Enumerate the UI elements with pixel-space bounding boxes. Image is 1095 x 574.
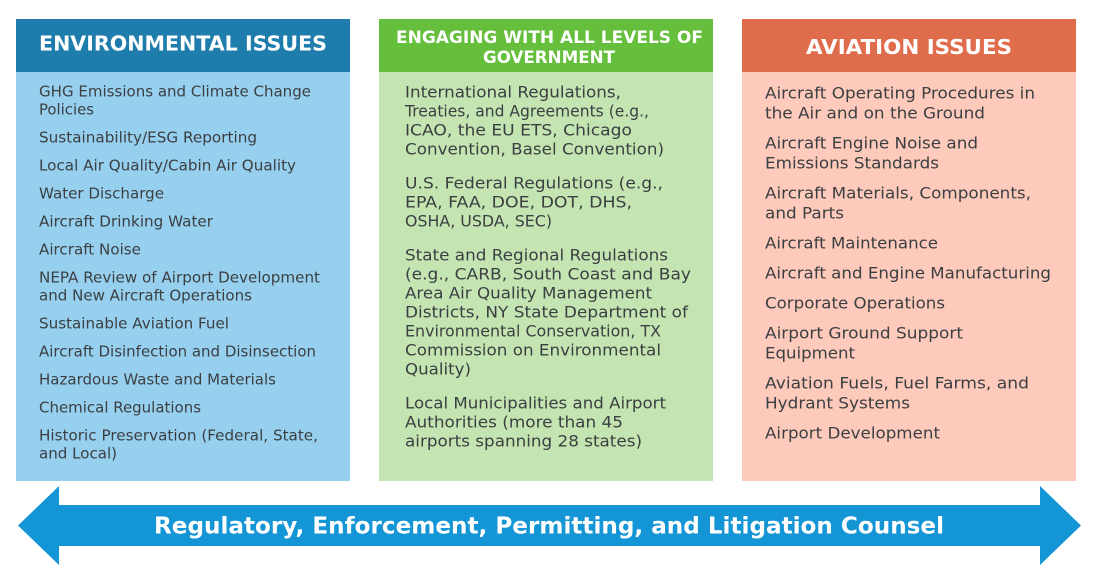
list: government levels: Commission on Environmental: [405, 340, 661, 360]
list: government levels: Area Air Quality Management: [405, 284, 652, 302]
panel: aviation issues: [742, 19, 1076, 481]
list: aviation topics: Aircraft and Engine Manufacturing: [765, 264, 1051, 282]
list: environmental topics: and Local): [39, 444, 117, 462]
list: environmental topics: Policies: [39, 100, 94, 118]
list: environmental topics: Hazardous Waste and Materials: [39, 370, 276, 388]
list: environmental topics: Sustainable Aviation Fuel: [39, 314, 229, 332]
list: environmental topics: Aircraft Disinfection and Disinsection: [39, 342, 316, 360]
arrow: regulatory, enforcement, permitting, and litigation counsel: [18, 486, 1081, 565]
list: aviation topics: and Parts: [765, 204, 844, 222]
heading: engaging with all levels of government: ENGAGING WITH ALL LEVELS OF: [396, 28, 703, 47]
list: government levels: (e.g., CARB, South Coast and Bay: [405, 264, 691, 284]
list: aviation topics: Aircraft Operating Procedures in: [765, 84, 1035, 102]
list: environmental topics: Chemical Regulations: [39, 398, 201, 416]
list: aviation topics: Aviation Fuels, Fuel Farms, and: [765, 374, 1029, 392]
list: environmental topics: GHG Emissions and Climate Change: [39, 82, 311, 100]
list: aviation topics: Corporate Operations: [765, 294, 945, 312]
panel: engaging with all levels of government: [379, 19, 713, 481]
list: environmental topics: Aircraft Drinking Water: [39, 212, 214, 230]
list: government levels: EPA, FAA, DOE, DOT, DHS,: [405, 192, 632, 212]
list: environmental topics: Water Discharge: [39, 184, 164, 202]
list: environmental topics: [39, 82, 320, 462]
list: environmental topics: NEPA Review of Airport Development: [39, 268, 320, 286]
list: government levels: ICAO, the EU ETS, Chicago: [405, 120, 632, 140]
list: aviation topics: Airport Ground Support: [765, 324, 963, 342]
heading: engaging with all levels of government: GOVERNMENT: [483, 48, 616, 67]
panel body: aviation: [742, 72, 1076, 481]
heading: aviation issues: [742, 19, 1076, 72]
heading: environmental issues: [16, 19, 350, 72]
list: aviation topics: Airport Development: [765, 424, 940, 442]
list: aviation topics: Emissions Standards: [765, 154, 939, 172]
list: aviation topics: the Air and on the Ground: [765, 104, 985, 122]
list: aviation topics: [765, 84, 1051, 442]
list: government levels: Environmental Conservation, TX: [405, 322, 661, 340]
list: government levels: Authorities (more than 45: [405, 412, 623, 432]
list: aviation topics: Equipment: [765, 344, 855, 362]
heading: engaging with all levels of government: [379, 19, 713, 72]
list: aviation topics: Hydrant Systems: [765, 394, 910, 412]
list: environmental topics: Local Air Quality/Cabin Air Quality: [39, 156, 296, 174]
list: government levels: Treaties, and Agreements (e.g.,: [404, 102, 649, 120]
list: government levels: International Regulations,: [405, 82, 621, 102]
list: government levels: [404, 82, 691, 450]
panel body: environmental: [16, 72, 350, 481]
list: aviation topics: Aircraft Maintenance: [765, 234, 938, 252]
heading: aviation issues: AVIATION ISSUES: [806, 35, 1012, 59]
list: environmental topics: Historic Preservation (Federal, State,: [39, 426, 318, 444]
heading: environmental issues: ENVIRONMENTAL ISSUES: [39, 32, 327, 56]
list: environmental topics: Aircraft Noise: [39, 240, 141, 258]
list: government levels: Quality): [405, 360, 471, 378]
list: aviation topics: Aircraft Materials, Components,: [765, 184, 1031, 202]
list: government levels: Local Municipalities and Airport: [405, 394, 666, 412]
list: aviation topics: Aircraft Engine Noise and: [765, 134, 978, 152]
list: government levels: OSHA, USDA, SEC): [405, 212, 552, 230]
list: environmental topics: and New Aircraft Operations: [39, 286, 252, 304]
list: government levels: Districts, NY State Department of: [405, 302, 688, 322]
list: environmental topics: Sustainability/ESG Reporting: [39, 128, 257, 146]
list: government levels: airports spanning 28 states): [405, 432, 642, 450]
arrow: regulatory, enforcement, permitting, and litigation counsel: Regulatory, Enforcement, Permitting, and Litigation Counsel: [154, 512, 944, 540]
panel: environmental issues: [16, 19, 350, 481]
list: government levels: U.S. Federal Regulations (e.g.,: [405, 174, 663, 192]
list: government levels: Convention, Basel Convention): [405, 140, 664, 158]
panel body: government: [379, 72, 713, 481]
list: government levels: State and Regional Regulations: [405, 246, 668, 264]
